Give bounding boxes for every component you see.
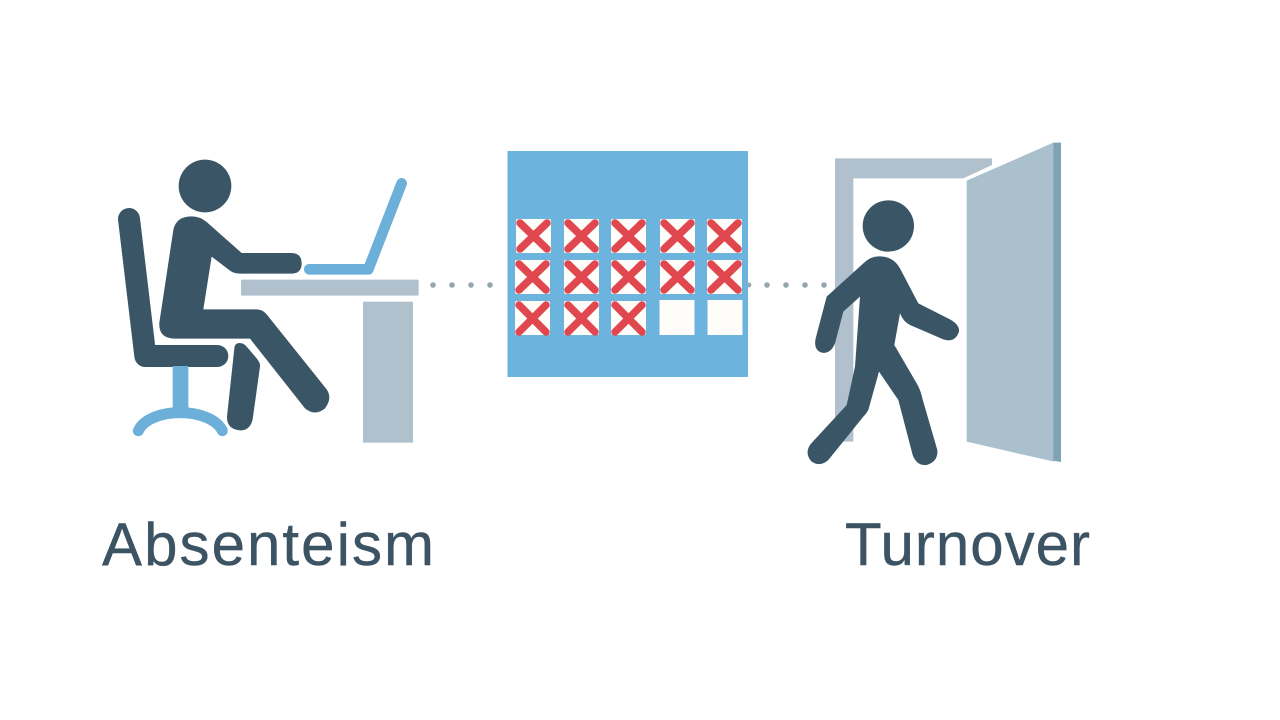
red cross marks <box>519 223 738 332</box>
label: Absenteism: Absenteism <box>102 511 434 578</box>
door frame <box>835 158 992 442</box>
seated person <box>159 160 329 430</box>
icon: person leaving through door <box>808 142 1061 465</box>
chair <box>129 219 222 431</box>
day cells <box>515 219 742 335</box>
connector: dotted line from desk to calendar <box>430 282 493 288</box>
calendar with absences <box>508 151 748 377</box>
walking person <box>808 200 959 465</box>
connector: dotted line from calendar to door <box>747 282 827 288</box>
desk <box>241 280 419 443</box>
label: Turnover: Turnover <box>845 511 1090 578</box>
open door <box>967 142 1061 462</box>
laptop <box>309 183 402 269</box>
icon: person working at desk <box>129 160 419 443</box>
